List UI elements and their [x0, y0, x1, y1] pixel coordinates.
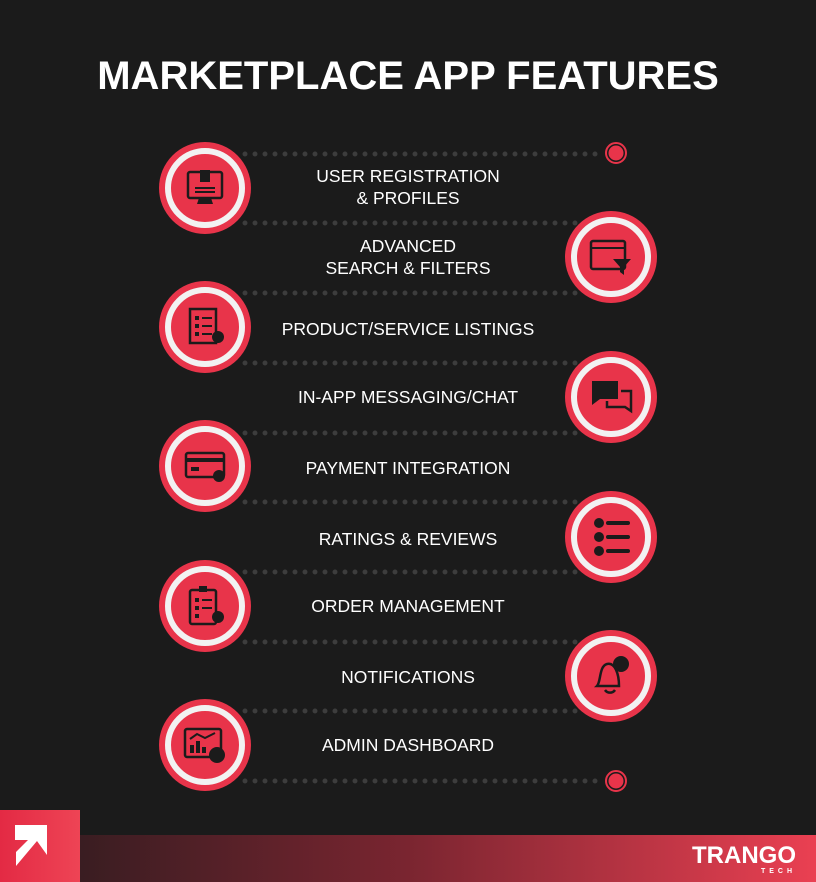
footer bar [0, 835, 816, 882]
end dot top [606, 143, 626, 163]
icon circle: payment [159, 420, 251, 512]
feature labels: & PROFILES [356, 188, 460, 208]
icon circle: notifications [565, 630, 657, 722]
feature labels: SEARCH & FILTERS [326, 258, 490, 278]
brand name: TECH [761, 868, 796, 875]
brand name: TRANGO [692, 842, 796, 869]
feature labels: PAYMENT INTEGRATION [306, 458, 510, 478]
title: MARKETPLACE APP FEATURES [97, 54, 719, 98]
feature labels: RATINGS & REVIEWS [319, 529, 497, 549]
footer logo mark [0, 810, 80, 882]
icon circle: user registration [159, 142, 251, 234]
icon circle: order management [159, 560, 251, 652]
icon circle: chat [565, 351, 657, 443]
end dot bottom [606, 771, 626, 791]
feature labels: ADMIN DASHBOARD [322, 735, 494, 755]
dotted lines [245, 154, 598, 781]
icon circle: ratings [565, 491, 657, 583]
feature labels: IN-APP MESSAGING/CHAT [298, 387, 518, 407]
icon circle: admin dashboard [159, 699, 251, 791]
feature labels: ADVANCED [360, 236, 456, 256]
feature labels: USER REGISTRATION [316, 166, 500, 186]
feature labels: ORDER MANAGEMENT [311, 596, 505, 616]
icon circle: listings [159, 281, 251, 373]
feature labels [282, 166, 534, 755]
icon circle: search filters [565, 211, 657, 303]
feature labels: PRODUCT/SERVICE LISTINGS [282, 319, 534, 339]
feature labels: NOTIFICATIONS [341, 667, 475, 687]
